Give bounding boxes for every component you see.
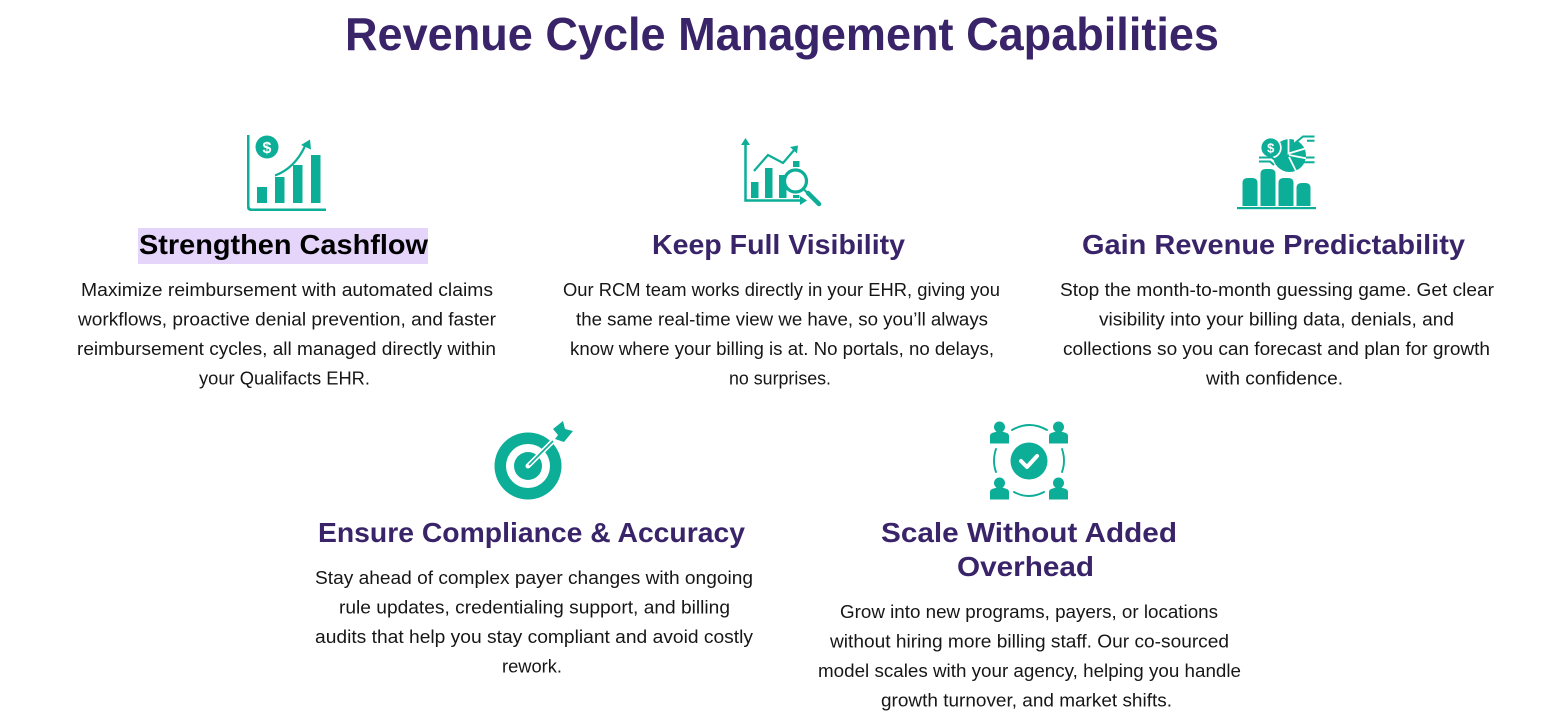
body text: rework. [502, 656, 562, 676]
body text: without hiring more billing staff. Our co-sourced [829, 632, 1229, 652]
panel: keep full visibility [563, 138, 1000, 388]
icon: target with arrow [494, 421, 573, 500]
body text [315, 568, 753, 676]
body text: your Qualifacts EHR. [199, 368, 370, 388]
body text: Grow into new programs, payers, or locations [840, 602, 1218, 622]
panel: gain revenue predictability [1060, 132, 1494, 388]
body text: Stay ahead of complex payer changes with ongoing [315, 568, 753, 588]
body text: collections so you can forecast and plan for growth [1063, 339, 1490, 359]
body text [77, 280, 496, 388]
icon: team around check mark [990, 422, 1068, 500]
body text: reimbursement cycles, all managed directly within [77, 339, 496, 359]
heading: Overhead [957, 551, 1094, 582]
body text [1060, 280, 1494, 388]
body text: no surprises. [729, 368, 831, 388]
body text: model scales with your agency, helping you handle [818, 661, 1241, 681]
heading: Strengthen Cashflow [139, 229, 428, 260]
icon: rising bar chart with dollar [247, 135, 326, 211]
heading: Gain Revenue Predictability [1082, 229, 1465, 260]
body text: with confidence. [1205, 368, 1343, 388]
body text: growth turnover, and market shifts. [881, 690, 1172, 710]
heading [881, 517, 1177, 582]
body text: Stop the month-to-month guessing game. Get clear [1060, 280, 1494, 300]
icon: chart with magnifier [741, 138, 819, 205]
body text: the same real-time view we have, so you’ll always [576, 310, 988, 330]
body text [818, 602, 1241, 710]
body text: Maximize reimbursement with automated claims [81, 280, 493, 300]
icon: bars with coin and pie chart: $ [1267, 140, 1275, 156]
icon: bars with coin and pie chart [1237, 132, 1316, 209]
body text: rule updates, credentialing support, and billing [339, 598, 730, 618]
body text: workflows, proactive denial prevention, and faster [77, 310, 496, 330]
panel: scale without added overhead [818, 422, 1241, 710]
heading: Scale Without Added [881, 517, 1177, 548]
body text: visibility into your billing data, denials, and [1099, 310, 1454, 330]
heading: Keep Full Visibility [652, 229, 905, 260]
panel: ensure compliance and accuracy [315, 421, 753, 676]
body text [563, 280, 1000, 388]
heading: Ensure Compliance & Accuracy [318, 517, 745, 548]
title: Revenue Cycle Management Capabilities [345, 8, 1219, 60]
body text: audits that help you stay compliant and avoid costly [315, 627, 753, 647]
panel: strengthen cashflow [77, 135, 496, 388]
icon: rising bar chart with dollar: $ [263, 140, 272, 157]
body text: know where your billing is at. No portals, no delays, [570, 339, 994, 359]
heading highlight [138, 228, 428, 264]
body text: Our RCM team works directly in your EHR, giving you [563, 280, 1000, 300]
